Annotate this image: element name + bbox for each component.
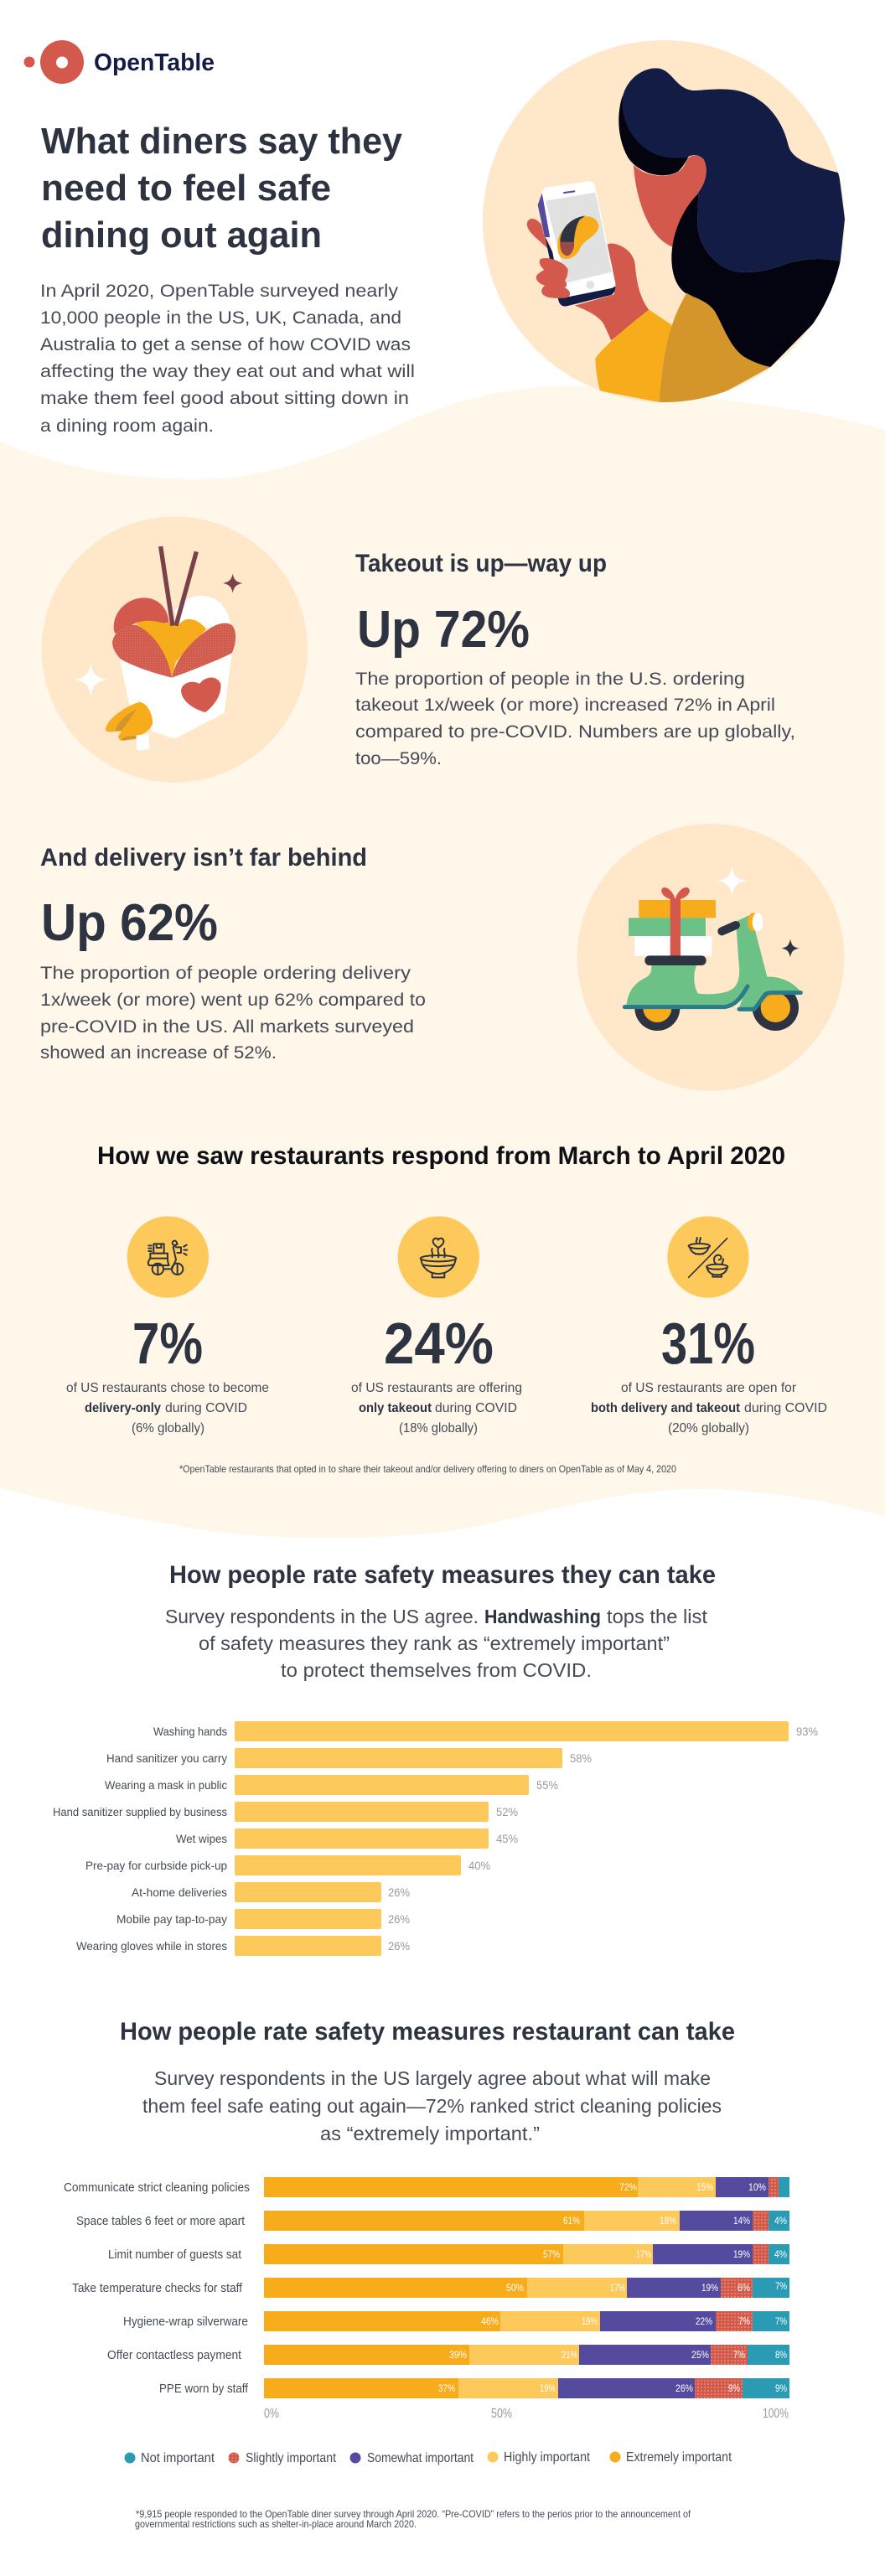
legend: Somewhat important <box>367 2451 474 2465</box>
illustration: delivery scooter <box>577 824 844 1091</box>
row: communicate strict cleaning policies <box>64 2177 789 2197</box>
row: space tables 6 feet or more apart: 4% <box>774 2215 787 2227</box>
row: take temperature checks for staff: 50% <box>506 2282 524 2294</box>
row: PPE worn by staff: 9% <box>775 2382 787 2394</box>
section intro: handwashing: of safety measures they rank as “extremely important” <box>199 1632 670 1654</box>
row: space tables 6 feet or more apart: 61% <box>563 2215 580 2227</box>
bar chart: personal safety measures: Wearing gloves while in stores <box>76 1939 227 1953</box>
row: hygiene-wrap silverware: 7% <box>775 2315 787 2327</box>
caption: of US restaurants are offering <box>351 1381 522 1395</box>
intro text block: Australia to get a sense of how COVID was <box>40 335 411 354</box>
row: space tables 6 feet or more apart: 18% <box>660 2215 676 2227</box>
stat: 24%: 24% <box>384 1311 494 1376</box>
row: offer contactless payment: 39% <box>449 2349 467 2361</box>
stacked bar chart: restaurant safety measures <box>64 2177 789 2421</box>
section heading: safety measures they can take: How people rate safety measures they can take <box>169 1561 716 1589</box>
icon: two bowls with slash <box>667 1216 749 1298</box>
row: take temperature checks for staff: 17% <box>610 2282 625 2294</box>
caption: during COVID <box>165 1401 247 1415</box>
bar chart: personal safety measures: Washing hands <box>153 1725 227 1738</box>
row: limit number of guests sat: 17% <box>636 2248 651 2260</box>
bar chart: personal safety measures: 55% <box>536 1778 558 1792</box>
row: offer contactless payment: 21% <box>562 2349 577 2361</box>
row: hygiene-wrap silverware: 19% <box>582 2315 598 2327</box>
row: offer contactless payment: 7% <box>733 2349 745 2361</box>
section intro: handwashing <box>165 1606 708 1681</box>
bar chart: personal safety measures: 52% <box>496 1805 518 1818</box>
caption: of US restaurants are open for <box>621 1381 797 1395</box>
delivery stat: Up 62% <box>41 894 218 952</box>
section heading: restaurants respond: How we saw restaurants respond from March to April 2020 <box>97 1142 785 1170</box>
stat column: delivery-only <box>66 1216 269 1435</box>
row: hygiene-wrap silverware: 7% <box>738 2315 750 2327</box>
row: offer contactless payment <box>107 2345 789 2365</box>
takeout text block <box>355 670 795 768</box>
delivery text block: showed an increase of 52%. <box>40 1043 277 1063</box>
takeout text block: compared to pre-COVID. Numbers are up globally, <box>355 722 795 742</box>
row: PPE worn by staff: 9% <box>728 2382 740 2394</box>
bar chart: personal safety measures: Pre-pay for curbside pick-up <box>85 1859 227 1872</box>
row: take temperature checks for staff: 7% <box>775 2280 787 2292</box>
takeout text block: too—59%. <box>355 749 442 768</box>
caption: of US restaurants chose to become <box>66 1381 269 1395</box>
axis labels: 0% <box>264 2407 279 2421</box>
bar chart: personal safety measures: 58% <box>570 1751 592 1765</box>
footnote: restaurants: *OpenTable restaurants that opted in to share their takeout and/or delivery offering to diners on OpenTable as of May 4, 2020 <box>179 1463 676 1475</box>
row: space tables 6 feet or more apart <box>76 2211 789 2231</box>
footnote: survey <box>135 2508 691 2530</box>
delivery heading: And delivery isn’t far behind <box>40 844 367 872</box>
row: PPE worn by staff: 37% <box>438 2382 455 2394</box>
caption <box>591 1381 827 1435</box>
stat: 7%: 7% <box>132 1311 203 1376</box>
row: communicate strict cleaning policies: 72% <box>619 2181 637 2193</box>
icon: scooter <box>127 1216 209 1298</box>
caption: only takeout <box>359 1401 432 1415</box>
title: dining out again <box>41 215 322 256</box>
legend: Slightly important <box>246 2451 336 2465</box>
row: PPE worn by staff: PPE worn by staff <box>159 2382 249 2396</box>
row: offer contactless payment: Offer contactless payment <box>107 2348 242 2362</box>
row: PPE worn by staff <box>159 2378 789 2398</box>
caption: delivery-only <box>85 1401 161 1415</box>
intro text block <box>40 282 415 436</box>
bar chart: personal safety measures: Wet wipes <box>176 1832 227 1845</box>
row: limit number of guests sat: 19% <box>733 2248 750 2260</box>
title: What diners say they <box>41 121 403 162</box>
row: take temperature checks for staff: 19% <box>701 2282 718 2294</box>
axis labels <box>264 2407 789 2421</box>
bar chart: personal safety measures: 26% <box>388 1912 410 1926</box>
delivery text block: pre-COVID in the US. All markets surveyed <box>40 1017 414 1037</box>
caption: (18% globally) <box>399 1421 478 1435</box>
delivery text block <box>40 964 426 1063</box>
intro text block: affecting the way they eat out and what will <box>40 362 415 381</box>
row: hygiene-wrap silverware: 46% <box>481 2315 499 2327</box>
section intro: handwashing: Survey respondents in the US agree. <box>165 1606 479 1627</box>
section intro: handwashing: tops the list <box>607 1606 708 1627</box>
section intro: cleaning policies: them feel safe eating out again—72% ranked strict cleaning policies <box>142 2095 722 2117</box>
footnote: survey: *9,915 people responded to the OpenTable diner survey through April 2020. “Pre-COVID” refers to the perios prior to the announcement of <box>136 2508 691 2520</box>
section heading: measures restaurants can take: How people rate safety measures restaurant can take <box>120 2018 735 2046</box>
illustration: takeout box <box>42 516 308 783</box>
bar chart: personal safety measures: Hand sanitizer supplied by business <box>53 1805 227 1818</box>
icon: bowl with heart <box>398 1216 479 1298</box>
caption: (20% globally) <box>668 1421 749 1435</box>
bar chart: personal safety measures: 45% <box>496 1832 518 1845</box>
row: hygiene-wrap silverware <box>123 2311 789 2331</box>
caption <box>351 1381 522 1435</box>
delivery text block: 1x/week (or more) went up 62% compared to <box>40 991 426 1010</box>
title: need to feel safe <box>41 168 331 209</box>
row: limit number of guests sat <box>108 2244 789 2264</box>
row: limit number of guests sat: 57% <box>543 2248 560 2260</box>
takeout stat: Up 72% <box>357 601 530 659</box>
bar chart: personal safety measures: 26% <box>388 1939 410 1953</box>
row: take temperature checks for staff: Take temperature checks for staff <box>72 2281 243 2295</box>
axis labels: 100% <box>763 2407 789 2421</box>
caption: both delivery and takeout <box>591 1401 741 1415</box>
legend: Highly important <box>504 2450 590 2465</box>
section intro: handwashing: to protect themselves from COVID. <box>281 1659 592 1681</box>
row: offer contactless payment: 25% <box>691 2349 709 2361</box>
row: space tables 6 feet or more apart: 14% <box>733 2215 750 2227</box>
bar chart: personal safety measures: Mobile pay tap-to-pay <box>116 1912 227 1926</box>
section intro: cleaning policies: as “extremely important.” <box>320 2123 540 2144</box>
takeout heading: Takeout is up—way up <box>355 550 607 577</box>
bar chart: personal safety measures: 26% <box>388 1885 410 1899</box>
axis labels: 50% <box>491 2407 512 2421</box>
row: take temperature checks for staff <box>72 2278 789 2298</box>
section intro: handwashing: Handwashing <box>484 1606 601 1627</box>
stat column: both delivery and takeout <box>591 1216 827 1435</box>
bar chart: personal safety measures: Hand sanitizer you carry <box>106 1751 227 1765</box>
delivery text block: The proportion of people ordering delivery <box>40 964 411 983</box>
takeout text block: takeout 1x/week (or more) increased 72% in April <box>355 696 775 715</box>
bar chart: personal safety measures <box>53 1721 818 1956</box>
row: PPE worn by staff: 19% <box>540 2382 556 2394</box>
row: space tables 6 feet or more apart: Space tables 6 feet or more apart <box>76 2214 246 2228</box>
stat: 31%: 31% <box>661 1311 755 1376</box>
row: limit number of guests sat: 4% <box>774 2248 787 2260</box>
intro text block: 10,000 people in the US, UK, Canada, and <box>40 308 401 328</box>
bar chart: personal safety measures: Wearing a mask in public <box>105 1778 227 1792</box>
stat column: only takeout <box>351 1216 522 1435</box>
row: limit number of guests sat: Limit number of guests sat <box>108 2248 242 2262</box>
title <box>41 121 403 256</box>
row: communicate strict cleaning policies: Communicate strict cleaning policies <box>64 2180 250 2195</box>
row: hygiene-wrap silverware: Hygiene-wrap silverware <box>123 2315 248 2329</box>
footnote: survey: governmental restrictions such as shelter-in-place around March 2020. <box>135 2518 417 2530</box>
caption: during COVID <box>435 1401 517 1415</box>
section intro: cleaning policies <box>142 2067 722 2144</box>
row: hygiene-wrap silverware: 22% <box>696 2315 712 2327</box>
illustration: woman looking at phone <box>483 40 845 402</box>
caption: (6% globally) <box>132 1421 204 1435</box>
row: offer contactless payment: 8% <box>775 2349 787 2361</box>
row: PPE worn by staff: 26% <box>675 2382 693 2394</box>
bar chart: personal safety measures: At-home deliveries <box>132 1885 227 1899</box>
intro text block: a dining room again. <box>40 416 214 436</box>
intro text block: In April 2020, OpenTable surveyed nearly <box>40 282 399 301</box>
logo: OpenTable <box>23 40 215 84</box>
row: communicate strict cleaning policies: 15% <box>696 2181 713 2193</box>
section intro: cleaning policies: Survey respondents in the US largely agree about what will make <box>154 2067 711 2089</box>
legend: Not important <box>141 2451 215 2465</box>
row: communicate strict cleaning policies: 10% <box>748 2181 766 2193</box>
bar chart: personal safety measures: 40% <box>468 1859 490 1872</box>
cream background wave <box>0 386 885 1538</box>
intro text block: make them feel good about sitting down in <box>40 389 409 408</box>
caption <box>66 1381 269 1435</box>
row: take temperature checks for staff: 6% <box>738 2282 750 2294</box>
bar chart: personal safety measures: 93% <box>796 1725 818 1738</box>
caption: during COVID <box>744 1401 827 1415</box>
legend: Extremely important <box>626 2450 732 2465</box>
legend <box>124 2450 732 2465</box>
takeout text block: The proportion of people in the U.S. ordering <box>355 670 745 689</box>
logo: OpenTable: OpenTable <box>94 49 215 76</box>
